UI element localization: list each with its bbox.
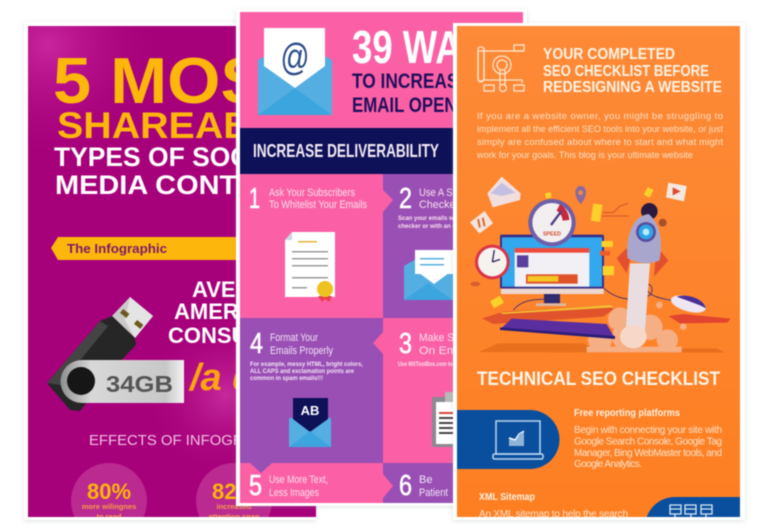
step 4: common in spam emails!!! [250, 376, 323, 382]
panel: 39 ways to increase email open rates [236, 9, 527, 506]
section: free reporting platforms: Manager, Bing WebMaster tools, and [574, 448, 722, 459]
icon: blueprint with gear [478, 45, 524, 92]
step 2: Use A Spam [419, 187, 471, 199]
stat circle: 80%: more wilingnes [82, 502, 136, 511]
subtitle: types of social media content: MEDIA CONTENT [55, 170, 296, 200]
rocket [617, 203, 668, 348]
clock [475, 245, 510, 279]
heading: your completed SEO checklist: YOUR COMPLETED [543, 46, 675, 63]
text: average americans consume: AVERAGE [192, 277, 299, 302]
step 3: Use MXToolBox.com to check [398, 362, 469, 368]
step 2: Scan your emails with a spam [398, 216, 483, 222]
step 4 [250, 328, 363, 382]
step 3: On Email [419, 345, 469, 357]
step 6: Patient [419, 487, 448, 499]
step 1: 1 [249, 183, 260, 215]
title: 5 most shareable: 5 MOST [53, 44, 308, 117]
step 6: Be [419, 474, 432, 486]
step 5: Less Images [269, 487, 319, 499]
smoke cloud [587, 302, 687, 352]
heading: your completed SEO checklist: REDESIGNING A WEBSITE [543, 79, 722, 96]
heading: your completed SEO checklist: SEO CHECKLIST BEFORE [543, 63, 709, 80]
illustration: website speed rocket launch [470, 177, 731, 353]
step 2: checker or with an online tool [398, 224, 483, 230]
ribbon: the infographic: The Infographic [67, 241, 167, 256]
stat circle: 82%: attention span [208, 512, 260, 521]
step 5: 5 [249, 470, 262, 502]
step 6 [399, 474, 448, 497]
section: xml sitemap [479, 492, 628, 520]
monitor [500, 235, 604, 306]
section: free reporting platforms: Free reporting platforms [574, 408, 681, 419]
heading: your completed SEO checklist [543, 46, 722, 96]
icon: clipboard checklist [431, 392, 454, 448]
icon: envelope with at sign: @ [280, 37, 310, 79]
icon: open envelopes [404, 250, 453, 300]
step 1: Ask Your Subscribers [269, 187, 355, 199]
stat circle: 82%: increased [216, 502, 252, 511]
step 4: 4 [250, 328, 263, 360]
step 2 [398, 186, 454, 229]
title: 39 ways: 39 WAYS [352, 21, 507, 73]
section: free reporting platforms: Begin with connecting your site with [574, 425, 722, 436]
heading: technical seo checklist: TECHNICAL SEO CHECKLIST [477, 369, 720, 390]
stat circle: 82%: 82% [212, 479, 256, 504]
speedometer: SPEED [543, 231, 561, 237]
title: 5 most shareable [54, 56, 237, 139]
floating notes [470, 177, 687, 308]
section: free reporting platforms: Google Search Console, Google Tag [574, 436, 722, 448]
text: average americans consume: AMERICANS [174, 299, 307, 324]
section: xml sitemap: XML Sitemap [479, 492, 535, 503]
step 5: Use More Text, [269, 474, 328, 486]
stat circle: 80% [70, 462, 148, 518]
step 3: Make Sure [419, 332, 469, 344]
panel: SEO checklist [453, 23, 745, 531]
subtitle: to increase email open rates [351, 72, 454, 113]
step 4: Emails Properly [270, 345, 333, 357]
step 1: To Whitelist Your Emails [269, 199, 367, 211]
ground shadow [478, 343, 725, 353]
step 4: ALL CAPS and exclamation points are [250, 369, 355, 375]
mouse and cable [513, 284, 708, 316]
subtitle: to increase email open rates: EMAIL OPEN RATES [352, 94, 517, 117]
step 2: Checker [419, 199, 459, 211]
icon: usb flash drive 34GB [47, 297, 184, 411]
step 4: For example, messy HTML, bright colors, [250, 362, 363, 368]
text: intro paragraph: implement all the efficient SEO tools into your website, or just [477, 124, 723, 135]
step 6: 6 [399, 470, 412, 502]
heading: effects of infographics: EFFECTS OF INFOGRAPHICS [89, 433, 299, 449]
stat circle: 80%: 80% [87, 479, 131, 504]
text: average americans consume: CONSUME [168, 323, 280, 348]
icon: document with seal [285, 232, 335, 302]
icon: envelope with at sign [258, 28, 332, 115]
text: intro paragraph [476, 111, 723, 161]
title: 5 most shareable: SHAREABLE [57, 105, 302, 146]
badge: laptop chart icon [457, 410, 560, 469]
subtitle: to increase email open rates: TO INCREASE [352, 70, 470, 93]
subtitle: types of social media content: TYPES OF SOCIAL [54, 142, 292, 172]
step 1 [250, 187, 368, 209]
stat circle: 80%: to read [96, 512, 122, 521]
step 3: 3 [399, 328, 412, 360]
badge: sitemap icon [645, 497, 740, 531]
text: intro paragraph: work for your goals. This blog is your ultimate website [476, 150, 693, 161]
stat: per day: /a day [188, 357, 300, 399]
speedometer [528, 199, 576, 246]
text: intro paragraph: simply are confused about where to start and what might [477, 137, 723, 148]
icon: AB envelope: AB [301, 403, 319, 418]
step 4: Format Your [270, 332, 318, 344]
grid tiles [240, 173, 454, 504]
keyboard and desk layers [482, 305, 731, 339]
panel: social media content infographic [24, 22, 316, 531]
text: intro paragraph: If you are a website owner, you might be struggling to [477, 111, 723, 122]
stat circle: 82% [196, 462, 272, 518]
step 5 [249, 474, 328, 499]
step 3 [398, 332, 454, 367]
ribbon: the infographic [50, 236, 237, 261]
banner: increase deliverability: INCREASE DELIVERABILITY [253, 141, 439, 161]
text: average americans consume [168, 280, 237, 344]
subtitle: types of social media content [53, 146, 237, 196]
section: free reporting platforms: Google Analytics. [574, 459, 642, 470]
section: free reporting platforms [574, 408, 722, 470]
icon: AB envelope [289, 398, 331, 447]
banner: increase deliverability [239, 127, 454, 175]
icon: usb flash drive 34GB: 34GB [106, 371, 173, 397]
section: xml sitemap: An XML sitemap to help the search [479, 509, 628, 520]
step 2: 2 [399, 183, 412, 215]
